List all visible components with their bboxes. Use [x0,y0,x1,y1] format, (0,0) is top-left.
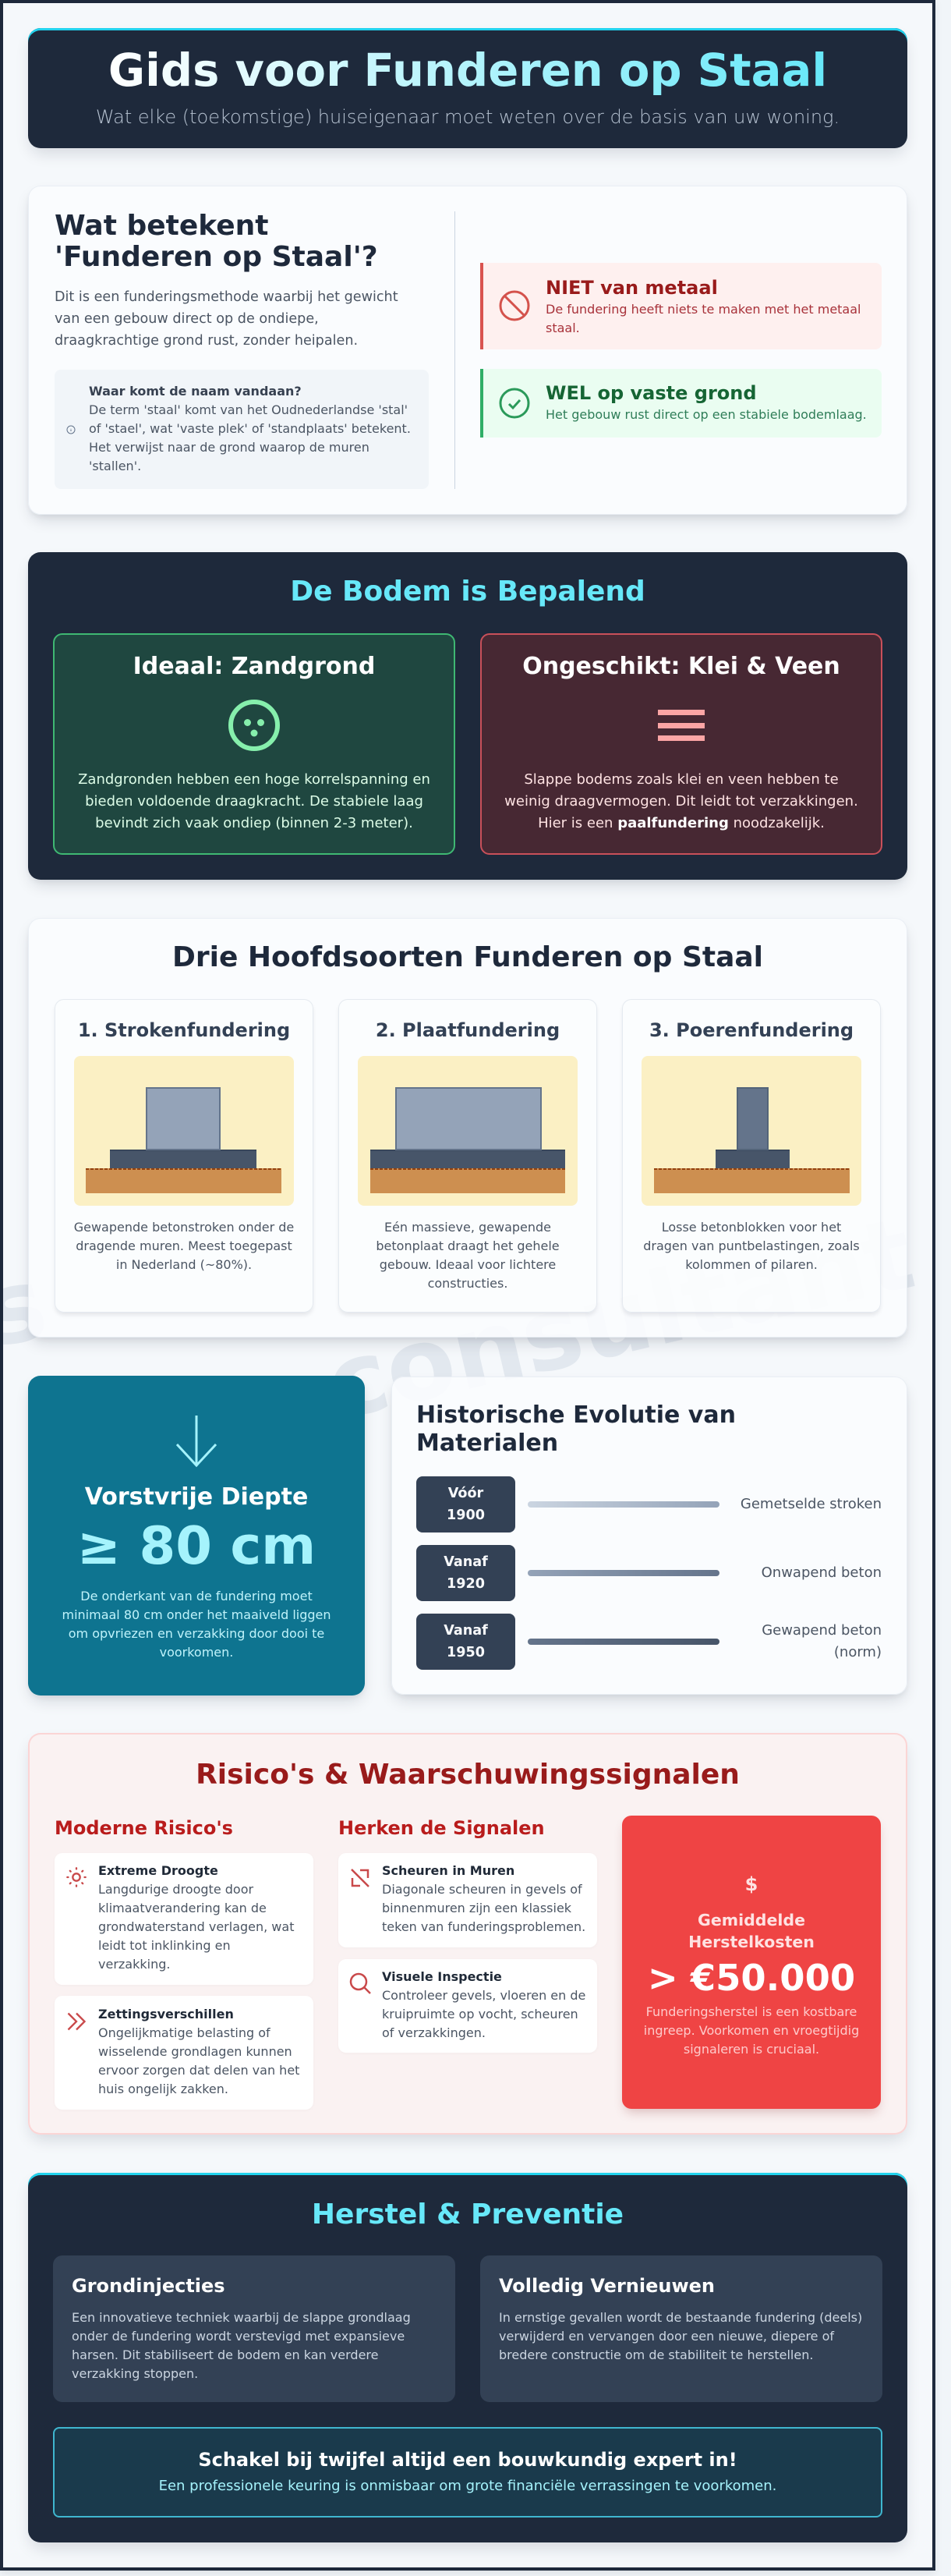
drought text: Extreme Droogte [98,1863,218,1878]
settlement text: ervoor zorgen dat delen van het [98,2063,299,2078]
frost text: minimaal 80 cm onder het maaiveld liggen [62,1607,331,1622]
strip text: in Nederland (~80%). [116,1257,252,1272]
inspection text [382,1969,585,2040]
expert text: Een professionele keuring is onmisbaar om grote financiële verrassingen te voorkomen. [159,2478,776,2494]
diagram: pad foundation [642,1056,861,1206]
clay text: Slappe bodems zoals klei en veen hebben te [524,771,839,788]
frost text: De onderkant van de fundering moet [80,1589,313,1603]
cracks text [382,1863,585,1934]
drought text: grondwaterstand verlagen, wat [98,1919,294,1934]
settlement text: huis ongelijk zakken. [98,2082,228,2096]
not metal detail: De fundering heeft niets te maken met het metaal [546,302,861,317]
frost number: ≥ 80 cm [77,1515,316,1576]
row: from 1950 [416,1614,882,1670]
title: Gids voor Funderen op Staal [108,44,827,97]
callout text [89,384,411,473]
cost text [644,2004,859,2057]
panel: clay and peat [480,633,882,855]
callout text: 'stallen'. [89,459,141,473]
inspection text: kruipruimte op vocht, scheuren [382,2007,578,2021]
sand text: bieden voldoende draagkracht. De stabiele laag [85,793,423,810]
drought text: leidt tot inklinking en [98,1938,231,1953]
not metal text: NIET van metaal [546,277,718,299]
injections text: Een innovatieve techniek waarbij de slappe grondlaag [72,2310,411,2325]
divider [454,211,455,489]
strip text: Gewapende betonstroken onder de [74,1220,294,1235]
progress bar [528,1501,719,1508]
heading: what it means: Wat betekent [55,210,268,242]
heading: what it means: 'Funderen op Staal'? [55,241,378,273]
injections text: verzakking stoppen. [72,2366,198,2381]
subtitle: Wat elke (toekomstige) huiseigenaar moet weten over de basis van uw woning. [96,106,840,128]
drought text: Langdurige droogte door [98,1882,253,1897]
pad text [643,1220,860,1272]
strip text: dragende muren. Meest toegepast [76,1238,292,1253]
expert heading: Schakel bij twijfel altijd een bouwkundig expert in! [198,2449,737,2471]
icon: magnifier [349,1973,371,1994]
frost text: voorkomen. [160,1645,233,1660]
period badge: 1920 [447,1576,485,1592]
panel: risks [28,1733,907,2135]
frost text: om opvriezen en verzakking door dooi te [69,1626,324,1641]
material label [762,1622,882,1660]
row: before 1900 [416,1476,882,1532]
sand heading: Ideaal: Zandgrond [133,653,375,680]
card: cracks [338,1853,597,1947]
heading: soil: De Bodem is Bepalend [290,576,645,608]
cost number: > €50.000 [648,1957,855,1999]
card: settlement [55,1996,313,2110]
callout: expert [53,2427,882,2518]
period badge [416,1476,515,1532]
card: injections [53,2255,455,2402]
drought text [98,1863,295,1972]
cost text: signaleren is cruciaal. [684,2042,819,2057]
cracks text: Diagonale scheuren in gevels of [382,1882,582,1897]
solid ground detail: Het gebouw rust direct op een stabiele bodemlaag. [546,407,867,422]
panel: definition [28,186,907,515]
card: pad foundation [622,999,881,1313]
period badge: 1950 [447,1645,485,1660]
frost text [62,1589,331,1660]
inspection text: Visuele Inspectie [382,1969,502,1984]
injections heading: Grondinjecties [72,2275,225,2297]
material label: Gemetselde stroken [741,1496,882,1512]
frost heading: Vorstvrije Diepte [85,1483,308,1511]
callout text: of 'stael', wat 'vaste plek' of 'standplaats' betekent. [89,421,411,436]
icon: chevrons [67,2012,86,2031]
icon: soft layers [658,710,705,741]
material label: Onwapend beton [762,1564,882,1581]
renewal text: verwijderd en vervangen door een nieuwe, diepere of [499,2329,834,2344]
material label: Gewapend beton [762,1622,882,1639]
panel: sand [53,633,455,855]
period badge: 1900 [447,1508,485,1523]
settlement text: wisselende grondlagen kunnen [98,2044,292,2059]
timeline [416,1476,882,1670]
period badge: Vanaf [444,1554,488,1570]
not metal detail [546,302,861,335]
panel: frost depth [28,1376,365,1695]
callout text: Waar komt de naam vandaan? [89,384,302,399]
renewal text: In ernstige gevallen wordt de bestaande fundering (deels) [499,2310,862,2325]
callout: not metal [480,263,882,349]
history heading [416,1401,736,1457]
panel: material history [391,1377,907,1695]
subheading: signals: Herken de Signalen [338,1817,545,1839]
diagram: slab foundation [358,1056,578,1206]
subheading: modern risks: Moderne Risico's [55,1817,233,1839]
callout: name origin [55,370,429,489]
injections text: harsen. Dit stabiliseert de bodem en kan verdere [72,2347,378,2362]
settlement text: Ongelijkmatige belasting of [98,2025,270,2040]
card: strip foundation [55,999,313,1313]
injections text: onder de fundering wordt verstevigd met expansieve [72,2329,405,2344]
clay text: Hier is een paalfundering noodzakelijk. [538,815,825,831]
pad text: dragen van puntbelastingen, zoals [643,1238,860,1253]
slab text: constructies. [428,1276,507,1291]
history heading: Historische Evolutie van [416,1401,736,1429]
heading: types: Drie Hoofdsoorten Funderen op Staal [172,941,763,973]
definition text [55,289,398,349]
slab heading: 2. Plaatfundering [376,1019,560,1041]
clay heading: Ongeschikt: Klei & Veen [522,653,840,680]
panel: soil [28,552,907,880]
cost text: ingreep. Voorkomen en vroegtijdig [644,2023,859,2038]
page frame: consultant [316,1196,924,1443]
pad heading: 3. Poerenfundering [649,1019,854,1041]
slab text [376,1220,560,1291]
sand text: Zandgronden hebben een hoge korrelspanning en [78,771,430,788]
renewal text [499,2310,862,2362]
strip heading: 1. Strokenfundering [78,1019,290,1041]
solid ground text: WEL op vaste grond [546,382,757,404]
progress bar [528,1570,719,1576]
cost text: Funderingsherstel is een kostbare [646,2004,857,2019]
injections text [72,2310,411,2381]
renewal heading: Volledig Vernieuwen [499,2275,715,2297]
drought text: klimaatverandering kan de [98,1901,267,1915]
cost label: Gemiddelde [698,1911,805,1929]
cost label [688,1911,815,1951]
icon: sun [66,1867,87,1887]
panel: foundation types [28,918,907,1338]
definition text: van een gebouw direct op de ondiepe, [55,311,319,327]
settlement text: Zettingsverschillen [98,2007,234,2021]
cracks text: Scheuren in Muren [382,1863,514,1878]
icon: crack [351,1869,369,1887]
header banner [28,28,907,148]
sand text: bevindt zich vaak ondiep (binnen 2-3 meter). [95,815,413,831]
pad text: Losse betonblokken voor het [662,1220,841,1235]
heading: risks: Risico's & Waarschuwingssignalen [196,1759,740,1791]
cracks text: binnenmuren zijn een klassiek [382,1901,571,1915]
icon: down arrow [176,1416,217,1468]
drought text: verzakking. [98,1957,170,1972]
settlement text [98,2007,299,2096]
strip text [74,1220,294,1272]
period badge [416,1614,515,1670]
not metal detail: staal. [546,321,580,335]
heading: what it means [55,210,378,273]
pad text: kolommen of pilaren. [685,1257,818,1272]
inspection text: of verzakkingen. [382,2025,486,2040]
material label: (norm) [834,1644,882,1660]
inspection text: Controleer gevels, vloeren en de [382,1988,585,2003]
definition text: Dit is een funderingsmethode waarbij het gewicht [55,289,398,305]
definition text: draagkrachtige grond rust, zonder heipalen. [55,333,358,349]
slab text: Eén massieve, gewapende [384,1220,551,1235]
icon: sand grains [228,700,280,751]
clay text [504,771,858,831]
period badge [416,1545,515,1601]
row: from 1920 [416,1545,882,1601]
cost label: Herstelkosten [688,1933,815,1951]
slab text: betonplaat draagt het gehele [376,1238,560,1253]
diagram: strip foundation [74,1056,294,1206]
callout: solid ground [480,369,882,438]
callout text: Het verwijst naar de grond waarop de muren [89,440,369,455]
history heading: Materialen [416,1430,558,1457]
callout text: De term 'staal' komt van het Oudnederlandse 'stal' [89,402,408,417]
icon: dollar: $ [745,1873,758,1895]
icon: check [499,388,530,418]
card: repair cost [622,1816,881,2109]
clay text: weinig draagvermogen. Dit leidt tot verzakkingen. [504,793,858,810]
cracks text: teken van funderingsproblemen. [382,1919,585,1934]
icon: ban [499,290,530,321]
slab text: gebouw. Ideaal voor lichtere [380,1257,556,1272]
icon: info [67,426,75,434]
renewal text: bredere constructie om de stabiliteit te herstellen. [499,2347,813,2362]
card: inspection [338,1959,597,2053]
heading: repair: Herstel & Preventie [312,2199,624,2231]
panel: repair and prevention [28,2173,907,2542]
sand text [78,771,430,831]
progress bar [528,1639,719,1645]
card: renewal [480,2255,882,2402]
card: slab foundation [338,999,597,1313]
card: drought [55,1853,313,1985]
period badge: Vanaf [444,1623,488,1639]
period badge: Vóór [448,1486,483,1501]
